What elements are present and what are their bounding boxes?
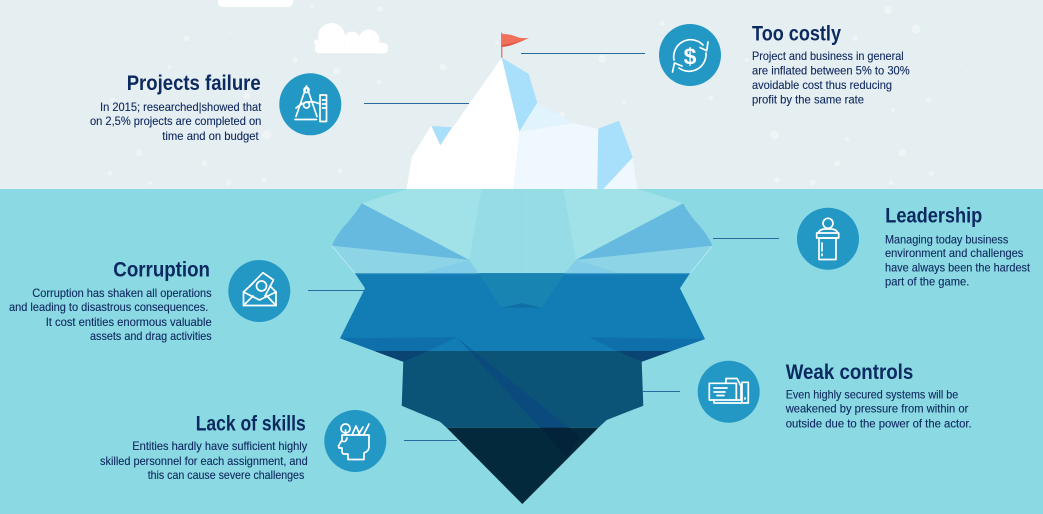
text: leadership body: have always been the hardest	[885, 262, 1031, 275]
iceberg below water: dark band	[374, 351, 672, 428]
flag	[501, 33, 529, 58]
icon: dollar with arrows: $	[684, 44, 697, 70]
text: projects failure body: time and on budget	[162, 130, 259, 143]
text: weak controls body	[785, 388, 972, 430]
panel: lack of skills	[100, 410, 386, 482]
connector lines	[308, 54, 779, 440]
icon: computer monitor and tower	[698, 361, 760, 423]
text: corruption body: assets and drag activities	[90, 330, 212, 343]
cloud: small	[314, 23, 388, 54]
sky background	[0, 0, 1043, 189]
text: too costly body	[752, 50, 910, 106]
text: leadership body	[885, 233, 1031, 289]
icon: envelope with banknote	[228, 260, 290, 322]
panel: weak controls	[698, 361, 972, 430]
icon: speaker at podium	[797, 208, 859, 270]
text: projects failure body: In 2015; researched|showed that	[100, 101, 262, 114]
text: corruption body: It cost entities enormous valuable	[46, 316, 212, 329]
text: lack of skills body: Entities hardly have sufficient highly	[132, 440, 307, 453]
text: leadership body: environment and challenges	[885, 247, 1023, 260]
text: weak controls body: weakened by pressure from within or	[785, 403, 968, 416]
text: lack of skills body: skilled personnel for each assignment, and	[100, 455, 308, 468]
text: weak controls body: outside due to the power of the actor.	[786, 417, 972, 430]
text: leadership body: Managing today business	[885, 233, 1008, 246]
text: projects failure body	[90, 101, 262, 143]
text: corruption body	[9, 287, 212, 343]
text: corruption body: Corruption has shaken all operations	[32, 287, 212, 300]
text: too costly body: are inflated between 5% to 30%	[752, 64, 910, 77]
icon: compass and ruler	[279, 73, 341, 135]
text: leadership body: part of the game.	[885, 276, 969, 289]
icon: dollar with arrows	[659, 24, 721, 86]
snow dots	[73, 5, 968, 185]
iceberg below water: blue band	[340, 273, 705, 351]
text: too costly body: profit by the same rate	[752, 93, 864, 106]
text: projects failure body: on 2,5% projects are completed on	[90, 115, 261, 128]
heading: leadership: Leadership	[885, 204, 982, 227]
panel: leadership	[797, 204, 1031, 289]
panel: corruption	[9, 259, 290, 343]
heading: projects failure: Projects failure	[127, 72, 261, 95]
text: lack of skills body	[100, 440, 308, 482]
text: too costly body: Project and business in general	[752, 50, 904, 63]
heading: lack of skills: Lack of skills	[196, 413, 306, 436]
heading: weak controls: Weak controls	[786, 361, 913, 384]
iceberg below water: upper light band	[332, 189, 713, 273]
iceberg below water: deep tip	[447, 428, 598, 504]
text: weak controls body: Even highly secured systems will be	[786, 388, 958, 401]
iceberg above water	[407, 58, 637, 189]
panel: too costly	[659, 23, 910, 106]
heading: too costly: Too costly	[752, 23, 841, 46]
cloud: top edge	[218, 0, 293, 7]
water background	[0, 189, 1043, 514]
text: corruption body: and leading to disastrous consequences.	[9, 301, 208, 314]
text: lack of skills body: this can cause severe challenges	[148, 469, 304, 482]
text: too costly body: avoidable cost thus reducing	[752, 79, 892, 92]
icon: head with tools	[324, 410, 386, 472]
panel: projects failure	[90, 72, 341, 143]
heading: corruption: Corruption	[113, 259, 210, 282]
